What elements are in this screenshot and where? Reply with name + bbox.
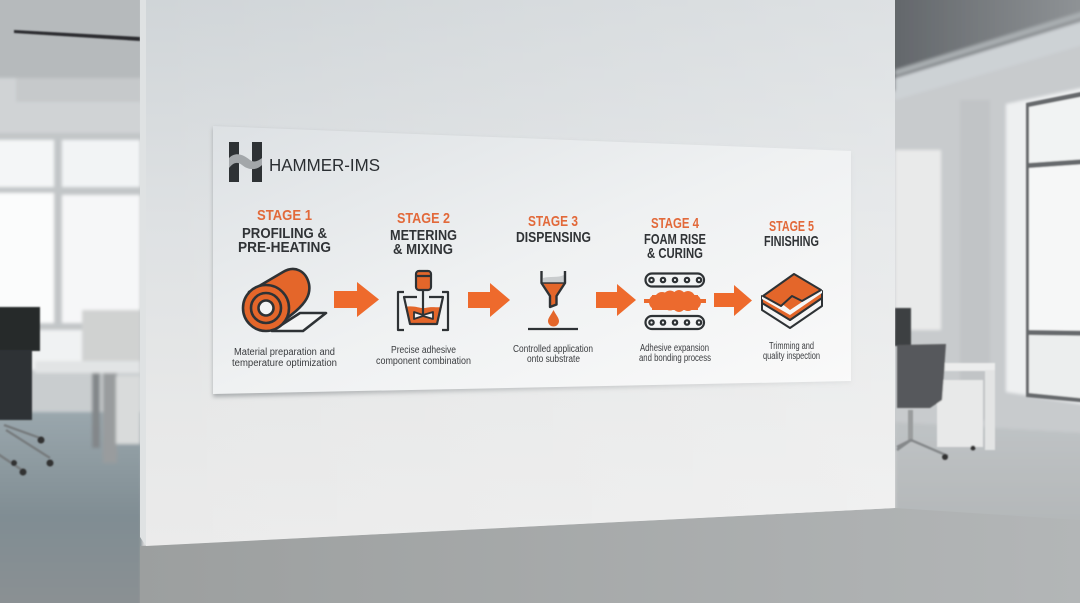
arrow 3 to 4 [596,284,636,316]
icon: dispensing nozzle [528,271,578,329]
stage 4 description [639,343,711,364]
stage 3 [513,213,593,365]
stage 4 description: Adhesive expansion [640,343,709,354]
stage 2 heading [390,227,457,258]
stage 5 description: Trimming and [769,341,814,352]
wall side face [140,0,146,546]
stage 2 heading: & MIXING [393,241,453,258]
sign shadow [213,128,851,397]
stage 1 description: Material preparation and [234,347,335,358]
stage 2 label: STAGE 2 [397,210,450,227]
logo: Hammer-IMS [229,142,380,182]
stage 2 description: Precise adhesive [391,345,456,356]
office chair, left [0,307,54,476]
stage 1 heading: PROFILING & [242,225,327,242]
icon: conveyor with foam [644,274,706,329]
stage 2 heading: METERING [390,227,457,244]
stage 1 label: STAGE 1 [257,207,312,224]
stage 3 description: Controlled application [513,344,593,355]
stage 5 [762,218,822,362]
stage 1 heading: PRE-HEATING [238,239,331,256]
stage 5 description: quality inspection [763,351,820,362]
stage 4 [639,215,711,364]
stage 3 description [513,344,593,365]
left office background [0,0,142,603]
stage 3 description: onto substrate [527,354,580,365]
icon: material roll [243,269,326,331]
icon: mixing vessel [398,271,448,330]
feature wall [146,0,895,546]
stage 2 description [376,345,471,367]
lower conveyor belt [646,316,704,329]
stage 3 label: STAGE 3 [528,213,578,230]
stage 5 label: STAGE 5 [769,218,814,235]
stage 1 [232,207,337,369]
stage 4 heading: & CURING [647,245,703,262]
stage 1 description [232,347,337,369]
logo wordmark: HAMMER-IMS [269,155,380,175]
stage 5 heading: FINISHING [764,233,819,250]
arrow 4 to 5 [714,285,752,316]
arrow 2 to 3 [468,283,510,317]
arrow 1 to 2 [334,282,379,317]
stage 1 description: temperature optimization [232,358,337,369]
icon: stacked layers [762,274,822,328]
stage 1 heading [238,225,331,256]
icon: H mark [229,142,262,182]
floor in front of wall [140,508,1080,603]
office desk and chair, right [895,308,995,460]
stage 2 [376,210,471,367]
window, right [1026,88,1080,404]
foam body [644,290,706,312]
ceiling light, left [14,30,140,41]
stage 3 heading: DISPENSING [516,229,591,246]
stage 2 description: component combination [376,356,471,367]
stage 4 heading: FOAM RISE [644,231,706,248]
sign panel [213,126,851,394]
stage 4 description: and bonding process [639,353,711,364]
stage 4 label: STAGE 4 [651,215,699,232]
upper conveyor belt [646,274,704,286]
right office background [890,0,1080,603]
stage 5 description [763,341,820,362]
stage 4 heading [644,231,706,262]
